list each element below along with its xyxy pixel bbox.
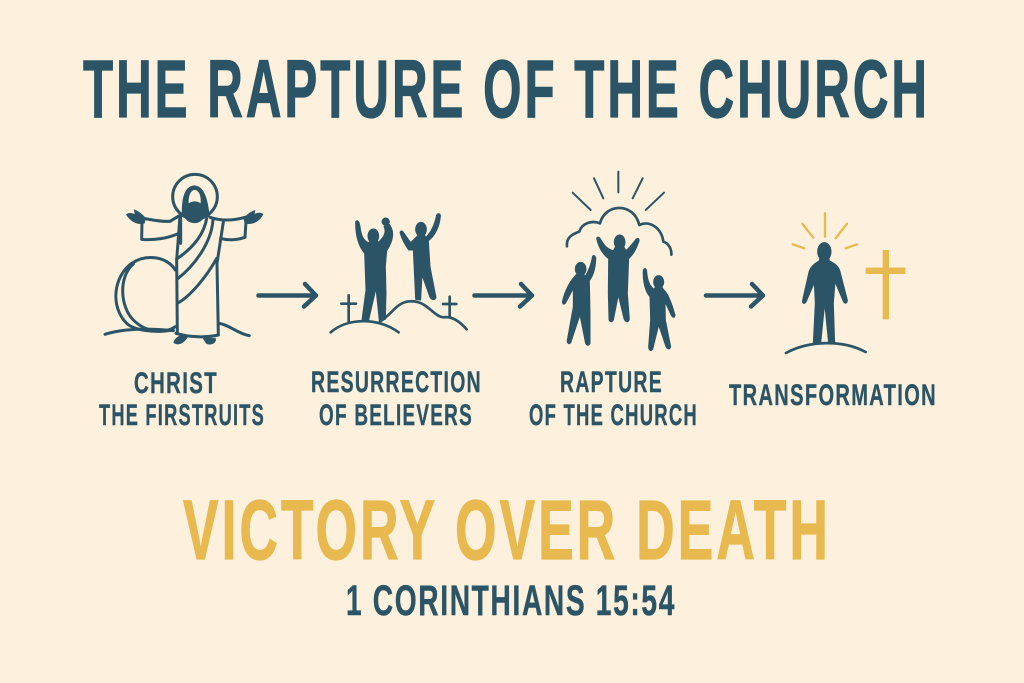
arrow 3	[706, 284, 763, 306]
label: Christ the firstfruits	[99, 367, 265, 432]
arrow 1	[258, 284, 316, 306]
label: resurrection of believers: OF BELIEVERS	[319, 399, 473, 432]
label: Christ the firstfruits: THE FIRSTRUITS	[99, 399, 265, 432]
arrow 2	[474, 284, 532, 306]
icon: rapture of the church	[562, 172, 675, 351]
icon: transformation figure with rays and cross	[786, 213, 905, 353]
ground	[786, 343, 866, 353]
icon: Christ with tomb stone	[105, 174, 263, 344]
label: rapture of the church: RAPTURE	[560, 366, 663, 399]
gold cross	[866, 250, 905, 319]
label: resurrection of believers: RESURRECTION	[311, 366, 482, 399]
icon: resurrection of believers	[331, 214, 467, 332]
figure	[803, 243, 847, 343]
label: rapture of the church: OF THE CHURCH	[529, 399, 698, 432]
label: Christ the firstfruits: CHRIST	[134, 367, 218, 400]
label: resurrection of believers	[311, 366, 482, 432]
label: rapture of the church	[529, 366, 698, 432]
scripture reference: 1 CORINTHIANS 15:54	[346, 578, 676, 625]
rays	[793, 213, 857, 248]
